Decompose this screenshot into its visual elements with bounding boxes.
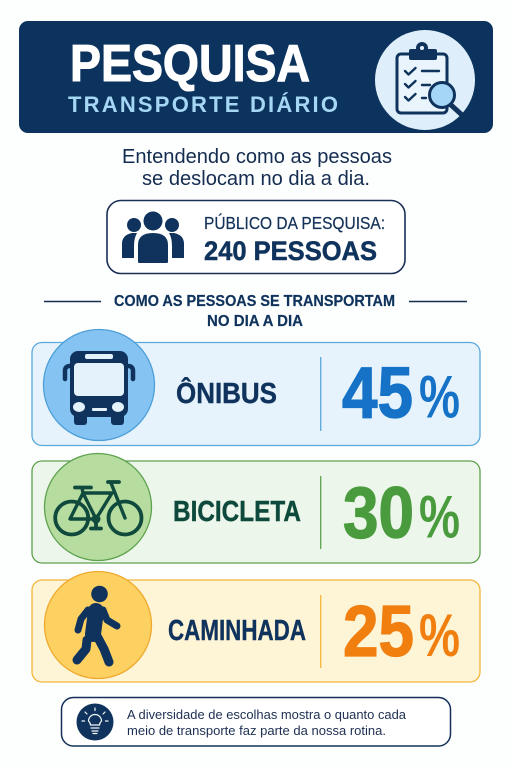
callout text: meio de transporte faz parte da nossa rotina. [127, 724, 386, 738]
icon: walking person [44, 572, 152, 678]
panel: ônibus [32, 330, 480, 446]
icon: people [122, 212, 184, 263]
icon: bus [44, 330, 154, 440]
header banner [19, 21, 493, 133]
section heading [44, 293, 467, 330]
callout text: A diversidade de escolhas mostra o quanto cada [127, 708, 406, 722]
value: % [419, 484, 460, 550]
icon: bicycle [44, 454, 152, 560]
title: PESQUISA [70, 35, 310, 93]
icon: light bulb [76, 704, 114, 740]
audience label: PÚBLICO DA PESQUISA: [204, 212, 385, 233]
panel: bicicleta [32, 454, 480, 563]
section heading: NO DIA A DIA [207, 313, 303, 330]
panel: caminhada [32, 572, 480, 682]
callout text [127, 708, 406, 738]
value: 45 [342, 354, 413, 434]
label: CAMINHADA [168, 615, 306, 647]
value [343, 592, 460, 672]
section heading: COMO AS PESSOAS SE TRANSPORTAM [114, 293, 395, 310]
audience value: 240 PESSOAS [204, 236, 377, 266]
value: 30 [343, 474, 414, 554]
intro text: se deslocam no dia a dia. [142, 168, 370, 190]
label: ÔNIBUS [176, 377, 277, 410]
intro text [122, 146, 392, 190]
value [342, 354, 460, 434]
subtitle: TRANSPORTE DIÁRIO [68, 92, 338, 117]
label: BICICLETA [173, 496, 301, 528]
icon: clipboard with magnifier [375, 30, 475, 130]
value: 25 [343, 592, 414, 672]
value [343, 474, 460, 554]
value: % [419, 602, 460, 669]
intro text: Entendendo como as pessoas [122, 146, 392, 168]
value: % [419, 364, 460, 430]
callout [62, 698, 450, 746]
panel: audience [107, 200, 405, 274]
